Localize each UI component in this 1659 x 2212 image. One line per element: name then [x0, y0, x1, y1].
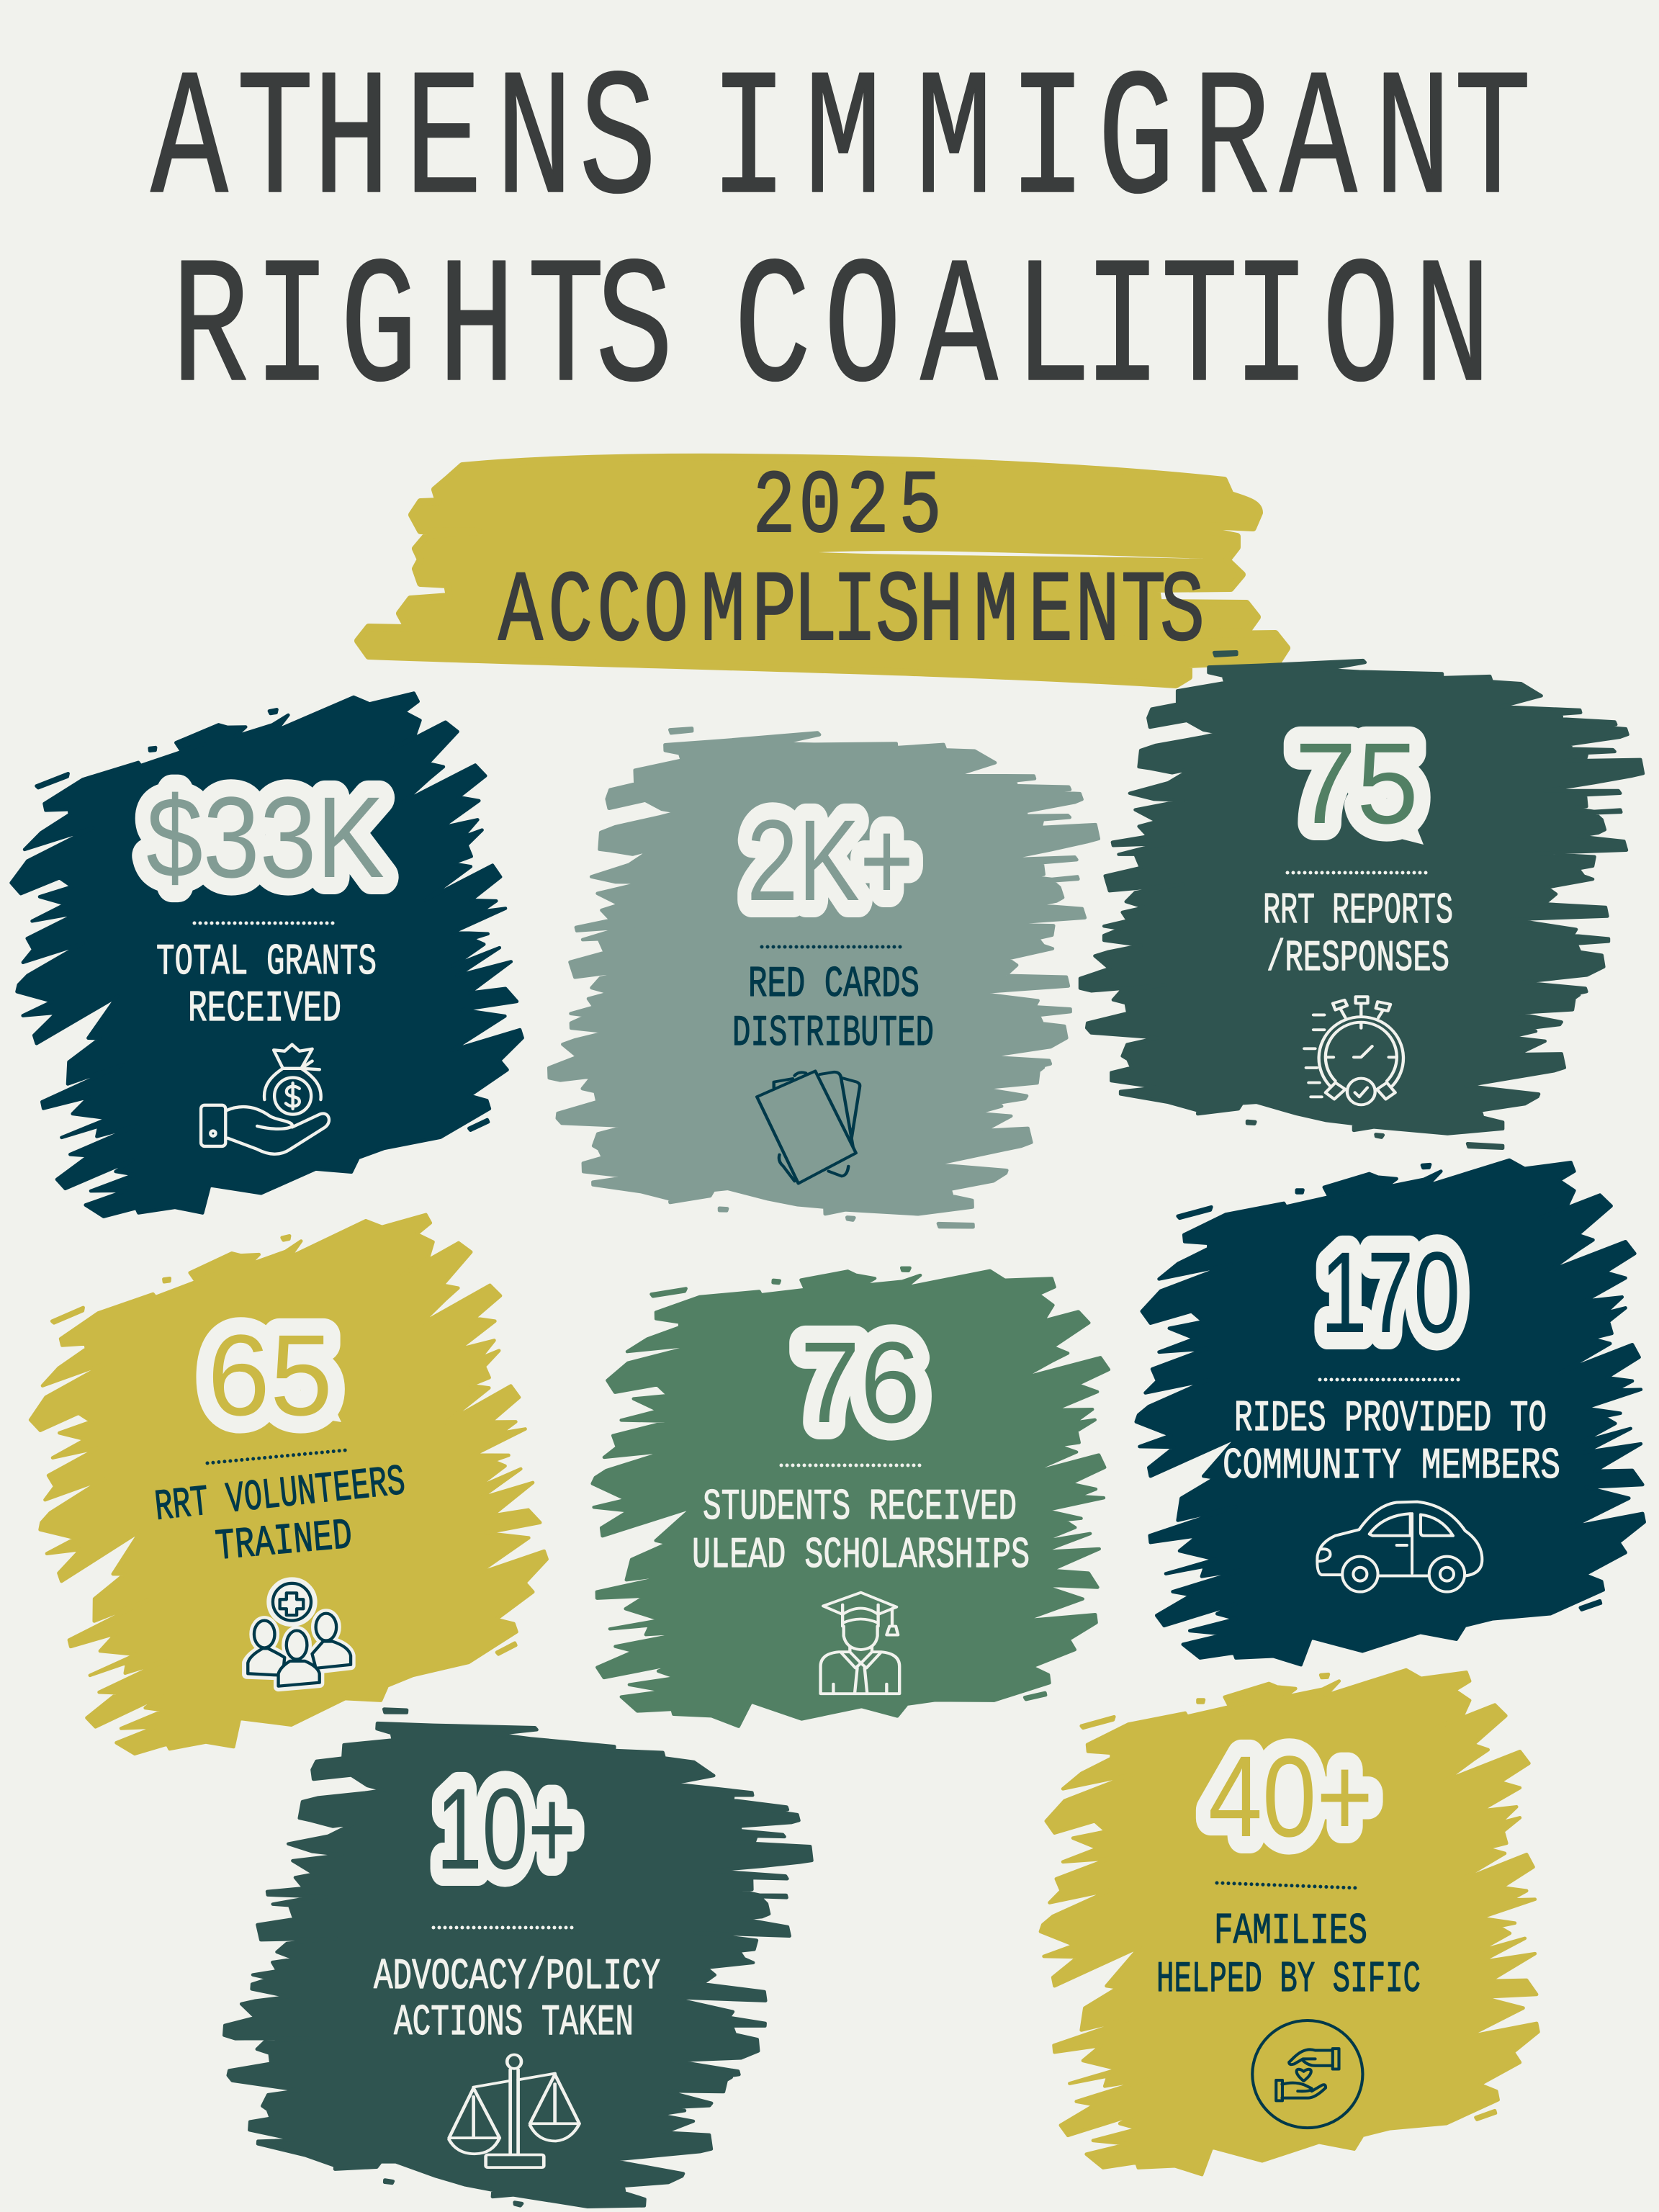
label: RECEIVED	[188, 985, 341, 1034]
brush blob	[0, 683, 537, 1230]
panel: rrt volunteers trained	[4, 1202, 567, 1769]
label: HELPED BY SIFIC	[1156, 1956, 1421, 2005]
label	[153, 1458, 408, 1573]
label: ACTIONS TAKEN	[394, 1999, 634, 2048]
icon: graduate	[821, 1593, 899, 1694]
label	[732, 961, 934, 1058]
label: RED CARDS	[748, 961, 920, 1010]
label: ULEAD SCHOLARSHIPS	[692, 1532, 1030, 1581]
label	[1223, 1395, 1560, 1491]
icon: stopwatch	[1304, 997, 1403, 1105]
label: /RESPONSES	[1267, 935, 1449, 984]
panel: rrt reports	[1080, 652, 1643, 1148]
icon: caring hands	[1252, 2020, 1362, 2128]
label	[1263, 887, 1453, 984]
title: ATHENS IMMIGRANT	[150, 42, 1532, 246]
brush blob	[537, 714, 1112, 1241]
heading: accomplishments: ACCOMPLISHMENTS	[498, 555, 1205, 670]
label: RRT REPORTS	[1263, 887, 1453, 936]
brush blob	[1080, 652, 1643, 1148]
panel: total grants received	[0, 683, 537, 1230]
brush sliver	[819, 551, 1205, 559]
label	[374, 1953, 660, 2048]
label	[1156, 1907, 1421, 2005]
label: ADVOCACY/POLICY	[374, 1953, 660, 2002]
panel: families helped	[1040, 1670, 1538, 2175]
yellow brush banner	[358, 457, 1287, 685]
heading: 2025: 2025	[752, 457, 942, 559]
banner: 2025 accomplishments	[358, 457, 1287, 685]
panel: red cards distributed	[537, 714, 1112, 1241]
brush blob	[572, 1238, 1126, 1757]
brush blob	[4, 1202, 567, 1769]
number: 76	[800, 1318, 920, 1447]
number: 75	[1295, 719, 1419, 848]
brush blob	[1136, 1160, 1645, 1665]
title: RIGHTS COALITION	[171, 230, 1491, 434]
icon: volunteers with medical cross	[247, 1582, 351, 1687]
icon: cards	[757, 1071, 860, 1184]
panel: ulead scholarships	[572, 1238, 1126, 1757]
brush blob	[213, 1699, 820, 2212]
panel: rides provided	[1136, 1160, 1645, 1665]
label: STUDENTS RECEIVED	[703, 1483, 1017, 1532]
label	[156, 938, 377, 1034]
icon: car	[1317, 1502, 1482, 1592]
icon: hand with money bag	[201, 1045, 329, 1154]
panel: advocacy actions	[213, 1699, 820, 2212]
label: DISTRIBUTED	[732, 1010, 934, 1058]
label: RRT VOLUNTEERS	[153, 1458, 408, 1533]
number: 10+	[436, 1764, 576, 1893]
icon: scales of justice	[449, 2055, 580, 2167]
number: 2K+	[747, 796, 914, 925]
number: $33K	[146, 773, 385, 902]
sticker backing	[247, 1582, 351, 1687]
number: 170	[1321, 1228, 1460, 1357]
label: FAMILIES	[1214, 1907, 1367, 1956]
title	[150, 42, 1532, 434]
label: TOTAL GRANTS	[156, 938, 377, 987]
label: TRAINED	[214, 1512, 354, 1573]
number: 40+	[1208, 1732, 1373, 1861]
brush blob	[1040, 1670, 1538, 2175]
label: COMMUNITY MEMBERS	[1223, 1442, 1560, 1491]
label	[692, 1483, 1030, 1581]
number: 65	[207, 1310, 333, 1439]
